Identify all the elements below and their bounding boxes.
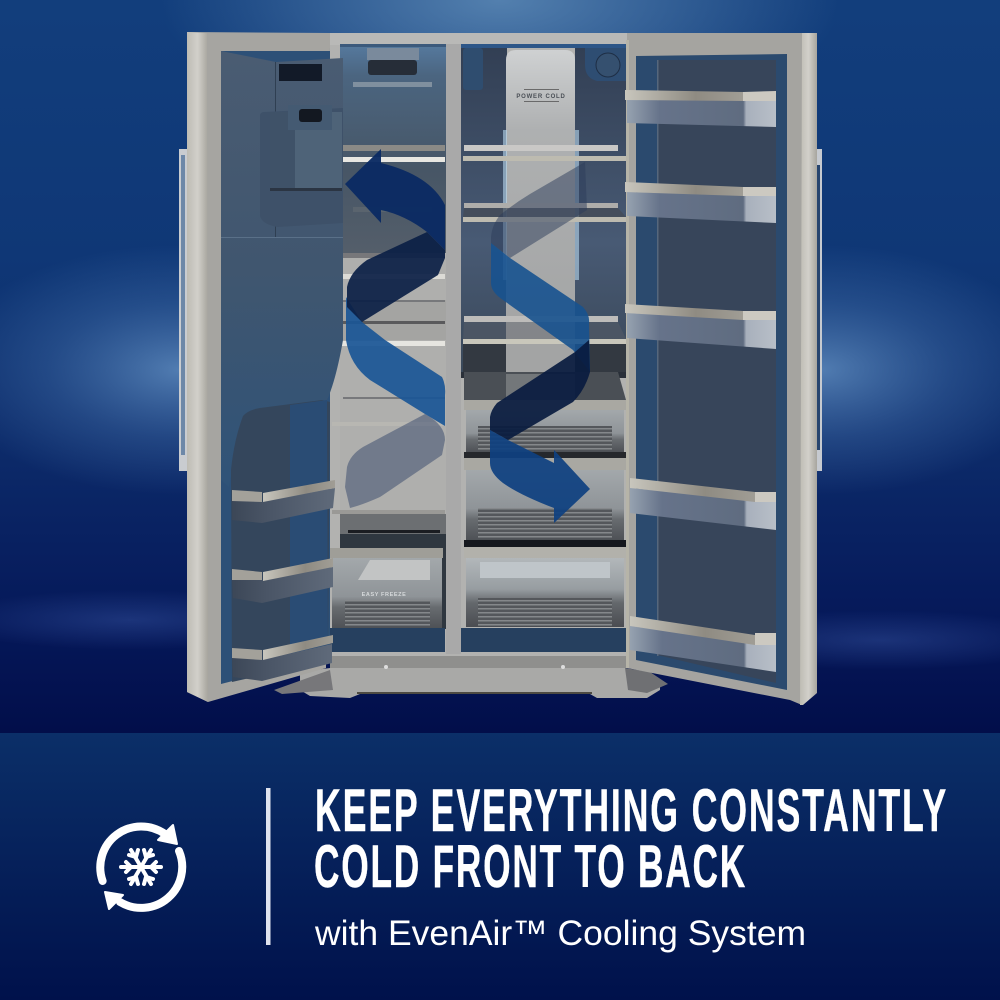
- arrow head: [345, 149, 445, 250]
- faded upper fold: [491, 162, 587, 258]
- fan housing: [585, 48, 627, 81]
- faded lower fold: [345, 414, 445, 508]
- dark fold: [347, 232, 445, 322]
- left door handle: [179, 149, 187, 471]
- top crisper drawer: [464, 372, 626, 458]
- Power Cold panel: [506, 50, 575, 372]
- right door handle: [815, 149, 822, 471]
- bin 3: [625, 304, 776, 349]
- ice vent: [367, 48, 419, 75]
- cabinet base plinth: [274, 652, 668, 698]
- ice dispenser: [260, 64, 343, 227]
- icon: snowflake with circular arrows: [100, 825, 182, 909]
- blue fold: [346, 297, 445, 426]
- cabinet interior: [330, 33, 630, 656]
- right door steel edge: [800, 33, 817, 705]
- bin B: [232, 558, 333, 603]
- Easy Freeze drawer: [330, 548, 443, 628]
- headline: [314, 777, 948, 900]
- Easy Freeze drawer: EASY FREEZE: [362, 592, 406, 598]
- cycle arrow top: [100, 825, 177, 881]
- right compartment: [461, 48, 628, 652]
- filter box: [463, 48, 483, 90]
- snowflake: [121, 850, 161, 884]
- arrow head: [490, 430, 590, 523]
- door bin housing: [221, 51, 343, 487]
- left shelves: [332, 145, 445, 514]
- bin 4: [630, 478, 776, 530]
- right door frame: [627, 33, 802, 705]
- left door: [187, 32, 343, 702]
- left door bins: [232, 480, 335, 681]
- bin 1: [625, 90, 776, 127]
- center mullion: [446, 44, 461, 654]
- subheading: with EvenAir™ Cooling System: [314, 913, 806, 953]
- left compartment: [330, 47, 446, 652]
- divider: [266, 788, 270, 945]
- door recess: [231, 400, 330, 682]
- middle crisper drawer: [464, 458, 626, 547]
- right door bins: [625, 90, 776, 672]
- bottom crisper drawer: [464, 547, 626, 627]
- right door recess: [657, 60, 776, 683]
- bin 5: [630, 616, 776, 672]
- bin 2: [625, 182, 776, 223]
- Power Cold panel: POWER COLD: [516, 94, 566, 100]
- left door steel edge: [187, 32, 208, 702]
- left door frame: [187, 32, 330, 702]
- dark fold: [490, 340, 590, 440]
- background glow panel: [0, 0, 1000, 733]
- bin C: [232, 635, 333, 681]
- light strips: [503, 130, 579, 280]
- left door liner: [221, 51, 330, 684]
- blue fold: [491, 243, 590, 372]
- cycle arrow bottom: [105, 851, 182, 909]
- right door: [625, 33, 817, 705]
- right shelves: [463, 145, 626, 372]
- airflow arrow: right section: [490, 162, 590, 523]
- bin A: [232, 480, 335, 523]
- bottom caption band: [0, 733, 1000, 1000]
- right door liner: [636, 54, 787, 690]
- refrigerator: [179, 32, 822, 705]
- airflow arrow: left section: [345, 149, 445, 508]
